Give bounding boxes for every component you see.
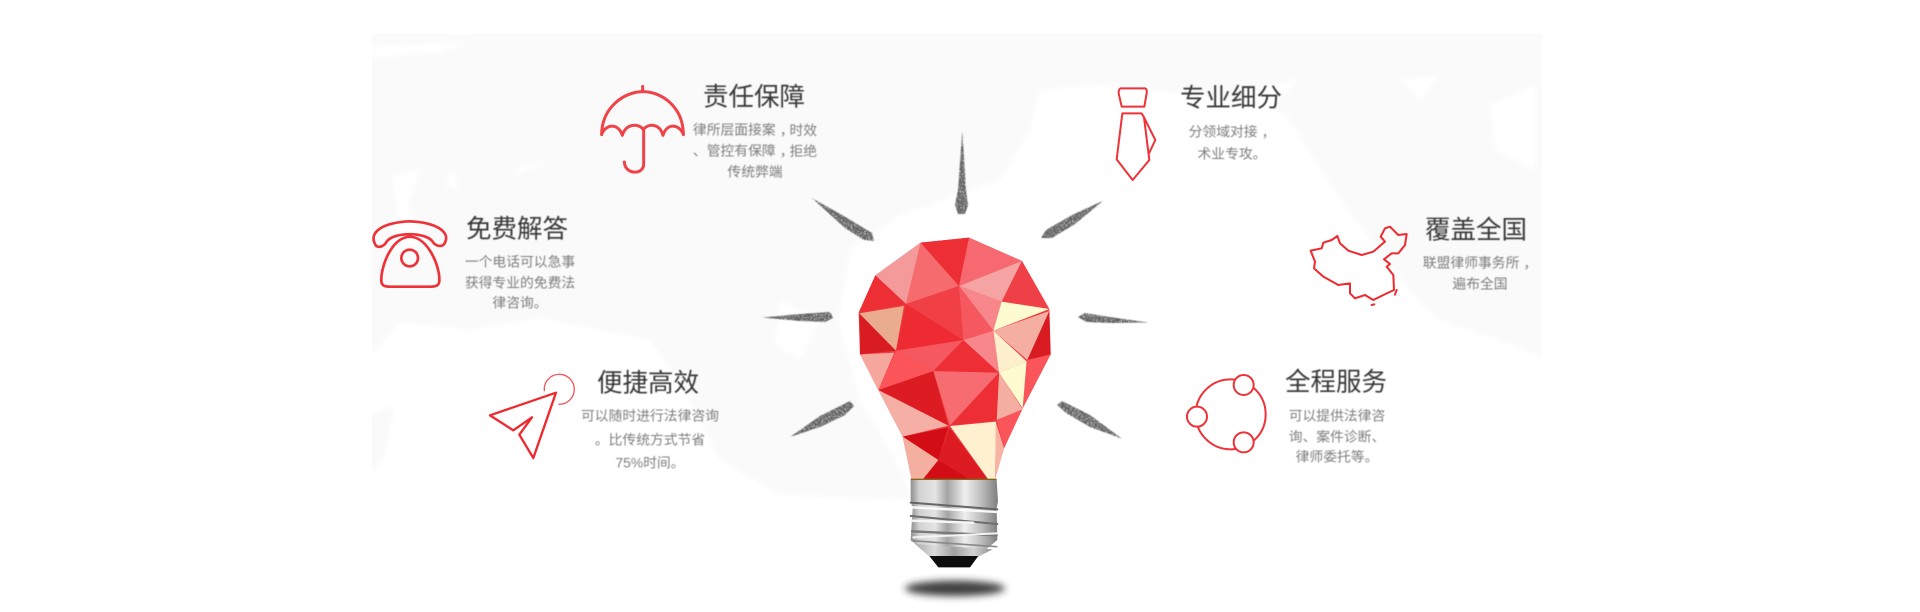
icon: necktie <box>1117 88 1155 180</box>
description <box>1189 124 1275 162</box>
description: 传统弊端 <box>727 164 783 180</box>
description: 遍布全国 <box>1452 276 1508 292</box>
description <box>693 122 817 180</box>
description: 可以提供法律咨 <box>1289 408 1385 424</box>
description: 。比传统方式节省 <box>595 432 705 448</box>
description <box>581 408 719 470</box>
bulb shadow <box>905 581 1005 596</box>
description: 分领域对接 ， <box>1189 124 1275 140</box>
description: 一个电话可以急事 <box>465 254 575 270</box>
description: 、管控有保障 ，拒绝 <box>693 144 817 158</box>
description <box>465 254 575 310</box>
light rays <box>762 131 1148 438</box>
description: 律咨询。 <box>492 296 548 310</box>
feature: 责任保障 <box>602 84 817 180</box>
metal screw base <box>911 479 998 567</box>
description: 75%时间。 <box>615 456 685 470</box>
icon: umbrella <box>602 86 683 172</box>
icon: telephone <box>374 221 446 287</box>
description: 术业专攻。 <box>1198 146 1266 162</box>
feature: 免费解答 <box>374 216 575 310</box>
feature: 全程服务 <box>1187 368 1387 464</box>
description: 联盟律师事务所 ， <box>1423 256 1537 270</box>
heading: 便捷高效 <box>597 370 699 398</box>
heading: 专业细分 <box>1180 84 1282 112</box>
description <box>1423 256 1537 292</box>
background world map <box>360 25 1550 500</box>
light bulb <box>859 238 1051 596</box>
icon: china map <box>1311 227 1407 305</box>
feature: 覆盖全国 <box>1311 216 1537 305</box>
feature: 专业细分 <box>1117 84 1282 180</box>
feature: 便捷高效 <box>490 370 719 470</box>
heading: 全程服务 <box>1285 368 1387 396</box>
description: 询、案件诊断、 <box>1289 428 1385 444</box>
heading: 免费解答 <box>466 216 568 244</box>
icon: connected circles <box>1187 375 1266 452</box>
description <box>1289 408 1385 464</box>
description: 可以随时进行法律咨询 <box>581 408 719 424</box>
description: 律所层面接案 ，时效 <box>693 122 817 138</box>
base tip <box>929 556 978 567</box>
polygon glass <box>859 238 1051 479</box>
description: 获得专业的免费法 <box>465 274 575 290</box>
heading: 责任保障 <box>703 84 805 112</box>
icon: paper plane <box>490 374 574 458</box>
heading: 覆盖全国 <box>1425 216 1527 244</box>
description: 律师委托等。 <box>1296 448 1378 464</box>
